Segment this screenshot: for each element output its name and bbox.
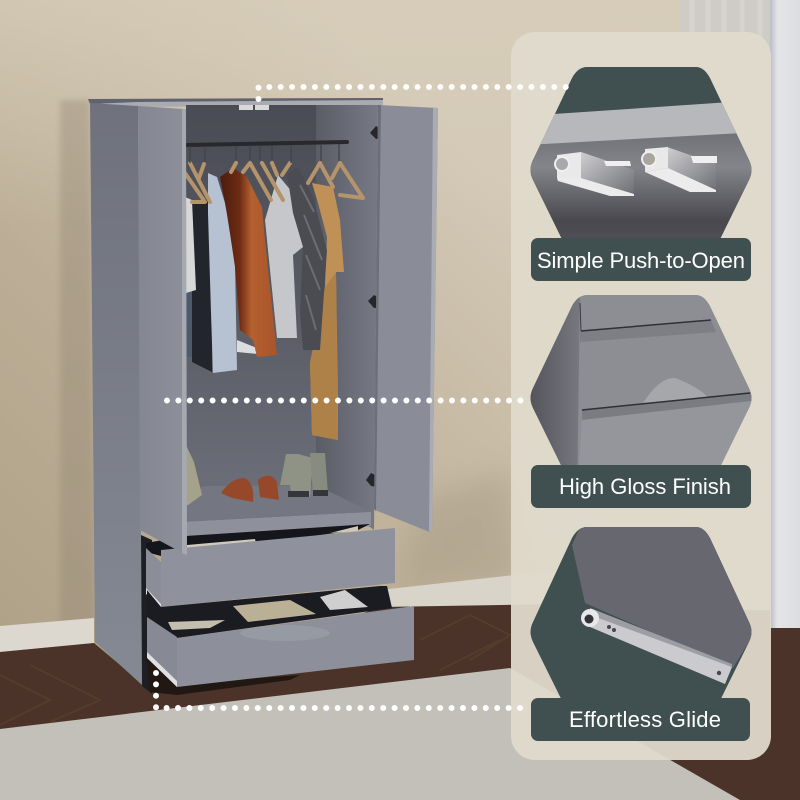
side panel bbox=[90, 103, 142, 685]
label bbox=[531, 465, 751, 508]
dotted leader: push-to-open bbox=[258, 87, 570, 99]
icon: gloss detail hexagon bbox=[530, 295, 752, 465]
sandals bbox=[221, 475, 279, 502]
panel: feature callouts bbox=[511, 32, 771, 760]
rug bbox=[0, 668, 740, 800]
dotted leader: gloss finish bbox=[167, 398, 526, 404]
dotted leader: glide bbox=[156, 673, 522, 708]
label bbox=[531, 238, 751, 281]
boots bbox=[280, 453, 328, 497]
skirting board right bbox=[380, 570, 560, 607]
interior back bbox=[186, 105, 317, 490]
lower drawer contents bbox=[168, 590, 368, 630]
door hinges bbox=[366, 126, 382, 487]
wardrobe bbox=[88, 98, 438, 695]
icon: runner detail hexagon bbox=[530, 527, 752, 698]
skirting board left bbox=[0, 618, 94, 652]
clothes bbox=[185, 167, 344, 440]
top panel bbox=[88, 98, 383, 107]
hangers bbox=[185, 163, 363, 202]
dark drawer gap bbox=[147, 586, 392, 638]
wardrobe plinth shadow bbox=[146, 656, 300, 695]
label text: Simple Push-to-Open bbox=[537, 248, 745, 273]
push-to-open catches bbox=[239, 105, 269, 110]
interior right wall bbox=[316, 105, 378, 530]
lower drawer bbox=[147, 606, 414, 687]
left door bbox=[138, 106, 187, 555]
right door bbox=[374, 105, 438, 533]
upper drawer bbox=[146, 524, 395, 607]
label text: High Gloss Finish bbox=[559, 474, 731, 499]
curtains bbox=[680, 0, 772, 610]
handbag bbox=[186, 445, 202, 505]
icon: hinge detail hexagon bbox=[530, 67, 752, 238]
callout: high gloss finish bbox=[530, 295, 752, 508]
hanging rail bbox=[186, 142, 347, 145]
interior shelf bbox=[186, 485, 371, 540]
callout: simple push-to-open bbox=[530, 67, 752, 281]
label text: Effortless Glide bbox=[569, 707, 721, 732]
callout: effortless glide bbox=[530, 527, 752, 741]
label bbox=[531, 698, 750, 741]
floor bbox=[0, 600, 800, 800]
cabinet front dark strip bbox=[141, 535, 152, 694]
